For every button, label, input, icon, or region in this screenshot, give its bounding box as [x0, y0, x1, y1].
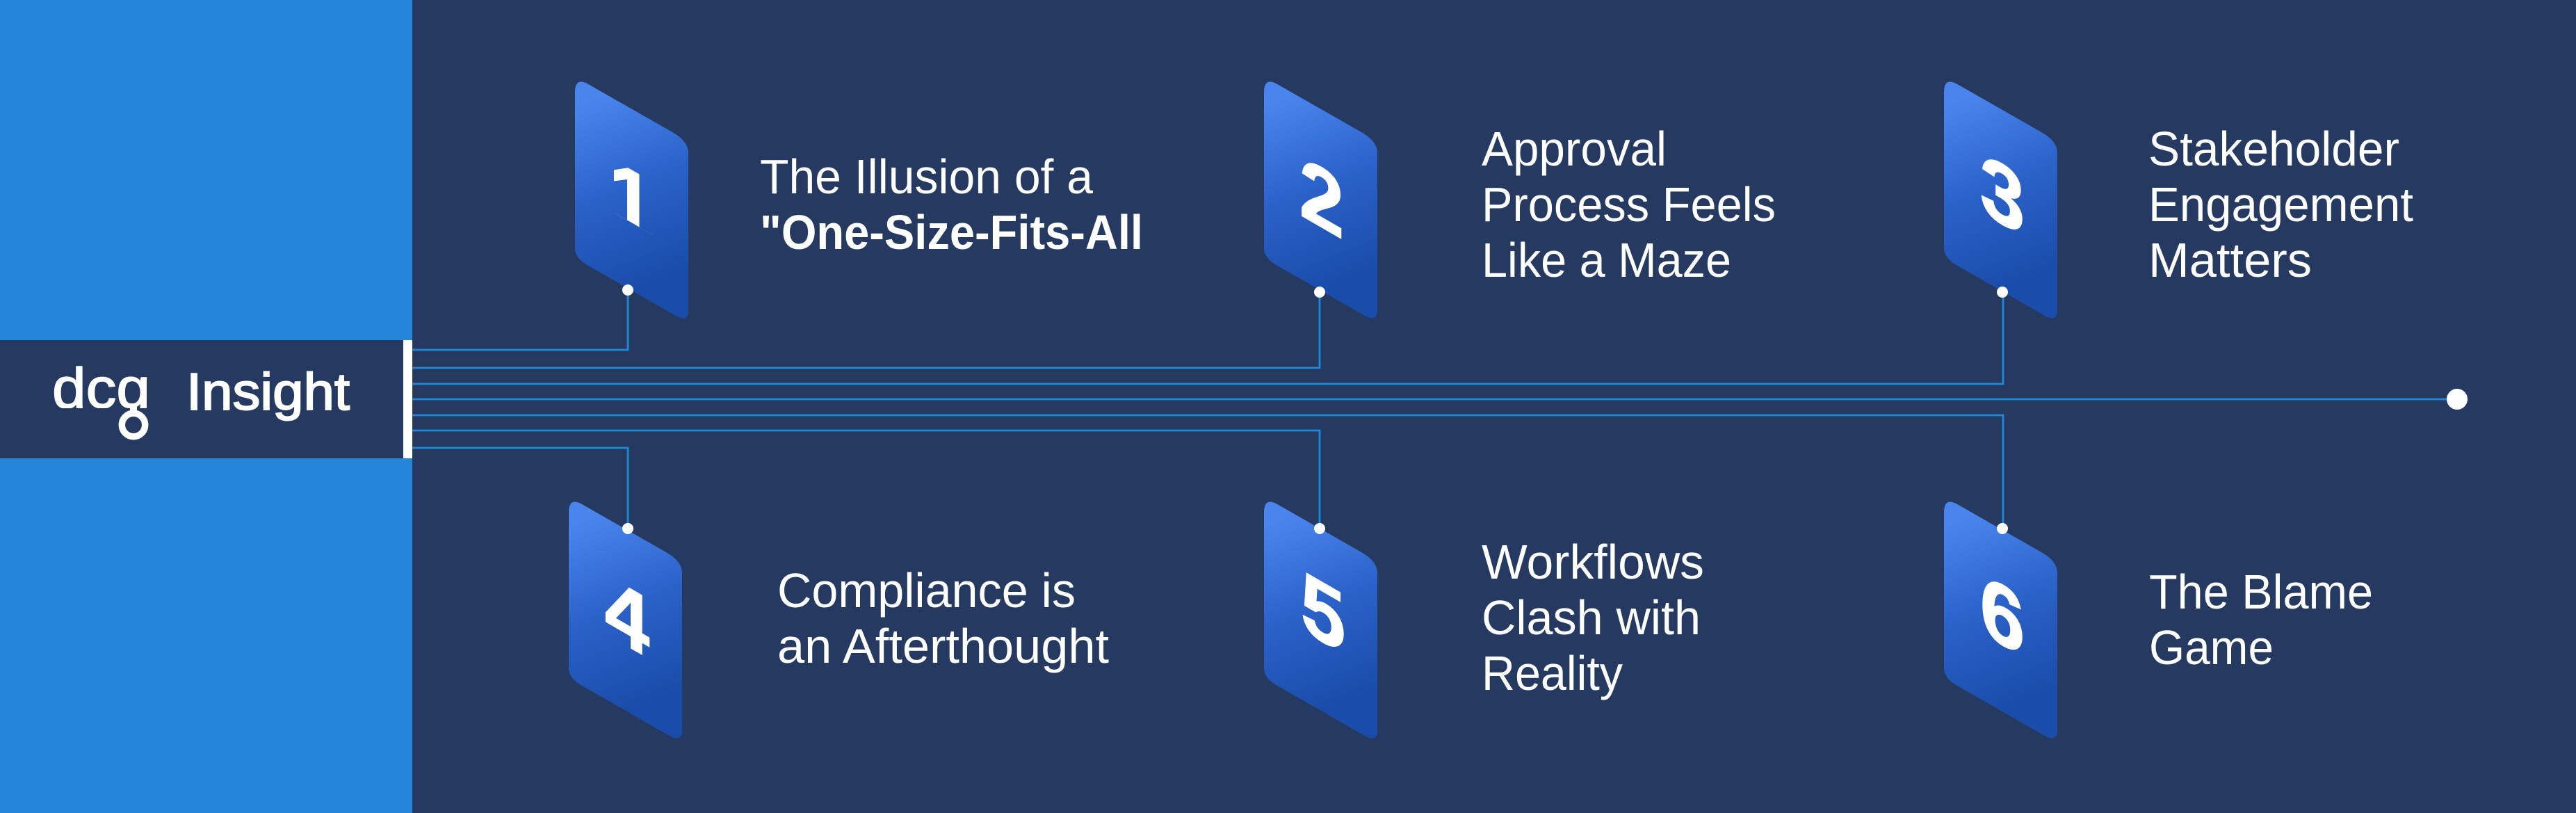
- text 3: Engagement: [2148, 177, 2413, 232]
- node 5: [1314, 523, 1325, 534]
- text 1: "One-Size-Fits-All: [760, 205, 1143, 259]
- node 4: [622, 523, 633, 534]
- text 5: Clash with: [1482, 590, 1701, 645]
- number 5: 5: [1301, 552, 1345, 673]
- text 4: [777, 563, 1109, 673]
- card 3: [1944, 81, 2057, 318]
- text 4: Compliance is: [777, 563, 1076, 618]
- item 3: [1944, 81, 2413, 318]
- card 1: [575, 81, 688, 318]
- panel: logo band: [0, 340, 412, 458]
- panel: left blue sidebar: [0, 0, 412, 813]
- text 2: Like a Maze: [1482, 233, 1731, 287]
- text 1: [760, 150, 1143, 259]
- text 2: Approval: [1482, 122, 1667, 176]
- number 6: 6: [1980, 555, 2025, 676]
- logo: dcg: dcg: [52, 357, 150, 420]
- text 6: Game: [2149, 620, 2274, 675]
- node 6: [1997, 523, 2008, 534]
- text 6: The Blame: [2149, 565, 2373, 619]
- text 6: [2149, 565, 2373, 675]
- node 1: [622, 284, 633, 296]
- text 3: Stakeholder: [2148, 122, 2399, 176]
- text 3: Matters: [2148, 233, 2312, 287]
- text 2: Process Feels: [1482, 177, 1776, 232]
- text 2: [1482, 122, 1776, 287]
- text 5: Workflows: [1482, 535, 1704, 589]
- node 2: [1314, 287, 1325, 298]
- text 1: The Illusion of a: [760, 150, 1093, 204]
- connector lines: [412, 290, 2457, 529]
- text 3: [2148, 122, 2413, 287]
- card 4: [569, 501, 682, 738]
- node 3: [1997, 287, 2008, 298]
- item 1: [575, 81, 1143, 318]
- item 5: [1264, 501, 1704, 738]
- heading: Insight: Insight: [186, 362, 350, 421]
- text 4: an Afterthought: [777, 619, 1109, 673]
- number 4: 4: [605, 556, 649, 677]
- card 5: [1264, 501, 1377, 738]
- card 2: [1264, 81, 1377, 318]
- item 2: [1264, 81, 1776, 318]
- text 5: Reality: [1482, 646, 1623, 700]
- logo: dcg: [54, 366, 149, 440]
- card 6: [1944, 501, 2057, 738]
- item 4: [569, 501, 1109, 738]
- end node dot: [2447, 389, 2468, 410]
- number 2: 2: [1299, 138, 1344, 259]
- text 5: [1482, 535, 1704, 700]
- number 1: 1: [609, 138, 654, 264]
- item 6: [1944, 501, 2373, 738]
- number 3: 3: [1980, 134, 2025, 255]
